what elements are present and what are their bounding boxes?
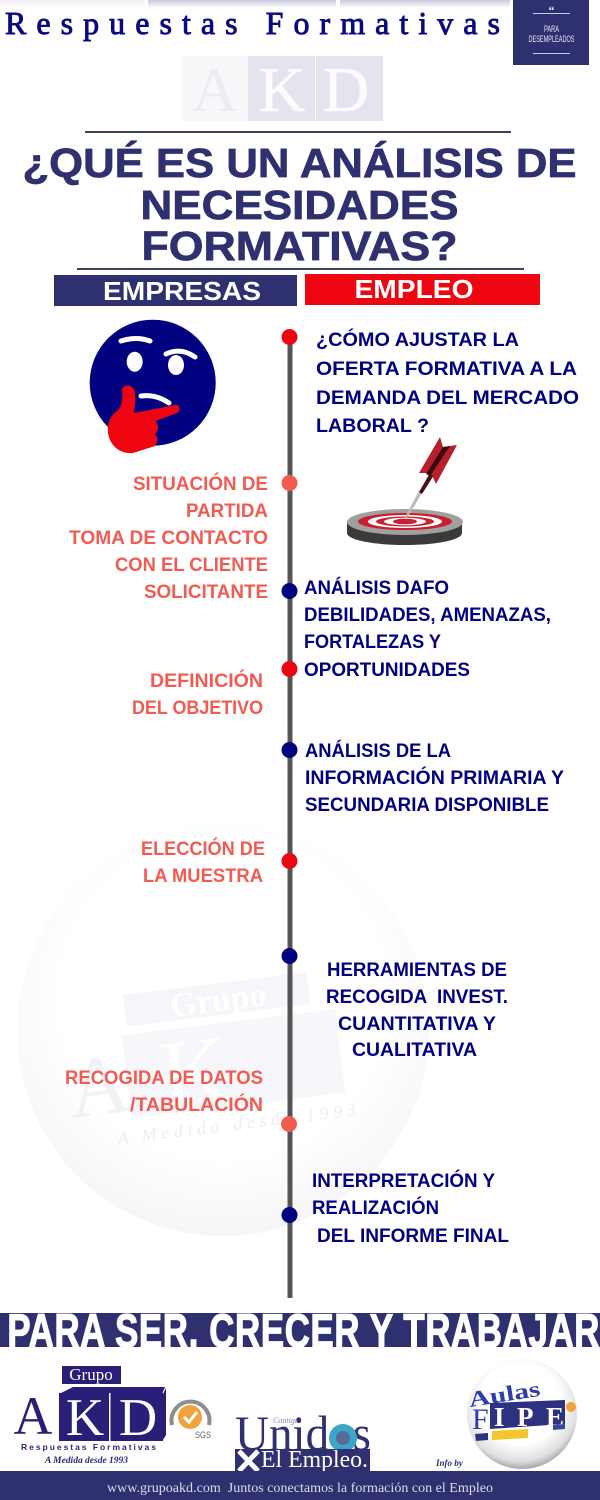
logo: grupo akd: A Medida desde 1993 [44,1456,128,1466]
header wordmark: Respuestas Formativas [5,5,500,41]
tab: empleo: EMPLEO [354,274,474,304]
logo: grupo akd: D [119,1389,157,1447]
step: herramientas: CUANTITATIVA Y [338,1014,496,1035]
logo: faded AKD: A [192,54,238,125]
footer bar: www.grupoakd.com Juntos conectamos la formación con el Empleo [107,1480,493,1495]
step: análisis de la información: SECUNDARIA DISPONIBLE [305,795,549,816]
timeline dots [281,329,298,1223]
watermark globe [17,824,429,1236]
step: análisis de la información: ANÁLISIS DE LA [305,740,451,762]
step: definición del objetivo [132,670,263,719]
question [316,329,579,437]
step: elección de la muestra [141,838,265,887]
icon: dart and target [347,437,463,545]
step: análisis dafo [304,577,551,681]
step: análisis dafo: ANÁLISIS DAFO [304,577,449,599]
title: FORMATIVAS? [142,223,458,269]
logo: faded AKD [181,54,383,125]
step: situación de partida: SITUACIÓN DE [133,473,268,495]
logo: grupo akd: K [66,1389,104,1447]
question: ¿CÓMO AJUSTAR LA [316,329,519,351]
step: interpretación: INTERPRETACIÓN Y [312,1170,495,1192]
step: definición del objetivo: DEFINICIÓN [150,670,263,692]
logo: grupo akd: Grupo [69,1365,113,1384]
logo: unidos x el empleo: El Empleo. [261,1447,368,1473]
question: OFERTA FORMATIVA A LA [316,359,577,380]
watermark globe: Grupo [168,976,268,1025]
step: herramientas [326,960,508,1061]
question: DEMANDA DEL MERCADO [316,388,579,409]
step: herramientas: RECOGIDA INVEST. [326,987,508,1008]
slogan banner: PARA SER, CRECER Y TRABAJAR [7,1305,599,1357]
footer bar [0,1471,600,1500]
step: análisis dafo: OPORTUNIDADES [304,660,470,681]
step: situación de partida: PARTIDA [186,501,268,522]
logo: grupo akd: Respuestas Formativas [21,1442,156,1452]
step: análisis de la información [305,740,564,816]
step: herramientas: CUALITATIVA [352,1040,477,1061]
step: recogida de datos: /TABULACIÓN [130,1094,263,1116]
step: análisis dafo: FORTALEZAS Y [304,632,441,653]
step: herramientas: HERRAMIENTAS DE [327,960,507,981]
watermark globe: A [62,1034,136,1137]
badge: para desempleados: PARA [544,24,559,34]
rule below title [77,268,524,270]
step: interpretación [312,1170,509,1247]
title: ¿QUÉ ES UN ANÁLISIS DE [22,140,576,186]
watermark globe: A Medida desde 1993 [115,1099,357,1149]
step: análisis de la información: INFORMACIÓN PRIMARIA Y [305,767,564,789]
logo: unidos x el empleo: Contigo [273,1416,299,1425]
step: interpretación: DEL INFORME FINAL [317,1226,509,1247]
step: recogida de datos [65,1068,263,1116]
credit: info by: Info by [435,1458,464,1468]
step: recogida de datos: RECOGIDA DE DATOS [65,1068,263,1089]
step: interpretación: REALIZACIÓN [312,1197,439,1219]
timeline [281,329,298,1298]
step: situación de partida: TOMA DE CONTACTO [69,528,268,549]
logo: aulas fpe globe [467,1359,577,1469]
step: situación de partida: CON EL CLIENTE [115,555,268,576]
timeline axis [288,337,292,1298]
logo: aulas fpe globe: Aulas [467,1376,542,1412]
tab: empleo [305,274,540,305]
top strip fragments [0,0,510,8]
logo: faded AKD: K [259,54,305,125]
badge: SGS certification: SGS [195,1430,211,1440]
tab: empresas: EMPRESAS [103,276,261,306]
step: definición del objetivo: DEL OBJETIVO [132,698,263,719]
title: NECESIDADES [140,182,458,228]
title [22,140,576,269]
logo: aulas fpe globe: IPE [494,1402,564,1432]
step: elección de la muestra: ELECCIÓN DE [141,838,265,860]
step: elección de la muestra: LA MUESTRA [143,866,263,887]
logo: unidos x el empleo: Unidos [235,1405,371,1461]
watermark globe: K [155,1016,235,1127]
tab: empresas [54,275,297,306]
logo: grupo akd: A [14,1386,52,1446]
logo: aulas fpe globe: F [472,1403,489,1436]
badge: para desempleados: “ [548,3,554,17]
step: situación de partida: SOLICITANTE [144,582,268,603]
badge: SGS certification [172,1402,211,1440]
logo: faded AKD: D [323,54,369,125]
step: situación de partida [69,473,268,603]
rule above title [85,131,511,133]
icon: thinking face [90,320,216,453]
step: análisis dafo: DEBILIDADES, AMENAZAS, [304,605,551,626]
badge: para desempleados [513,0,589,65]
logo: grupo akd [14,1365,166,1466]
question: LABORAL ? [316,416,429,437]
